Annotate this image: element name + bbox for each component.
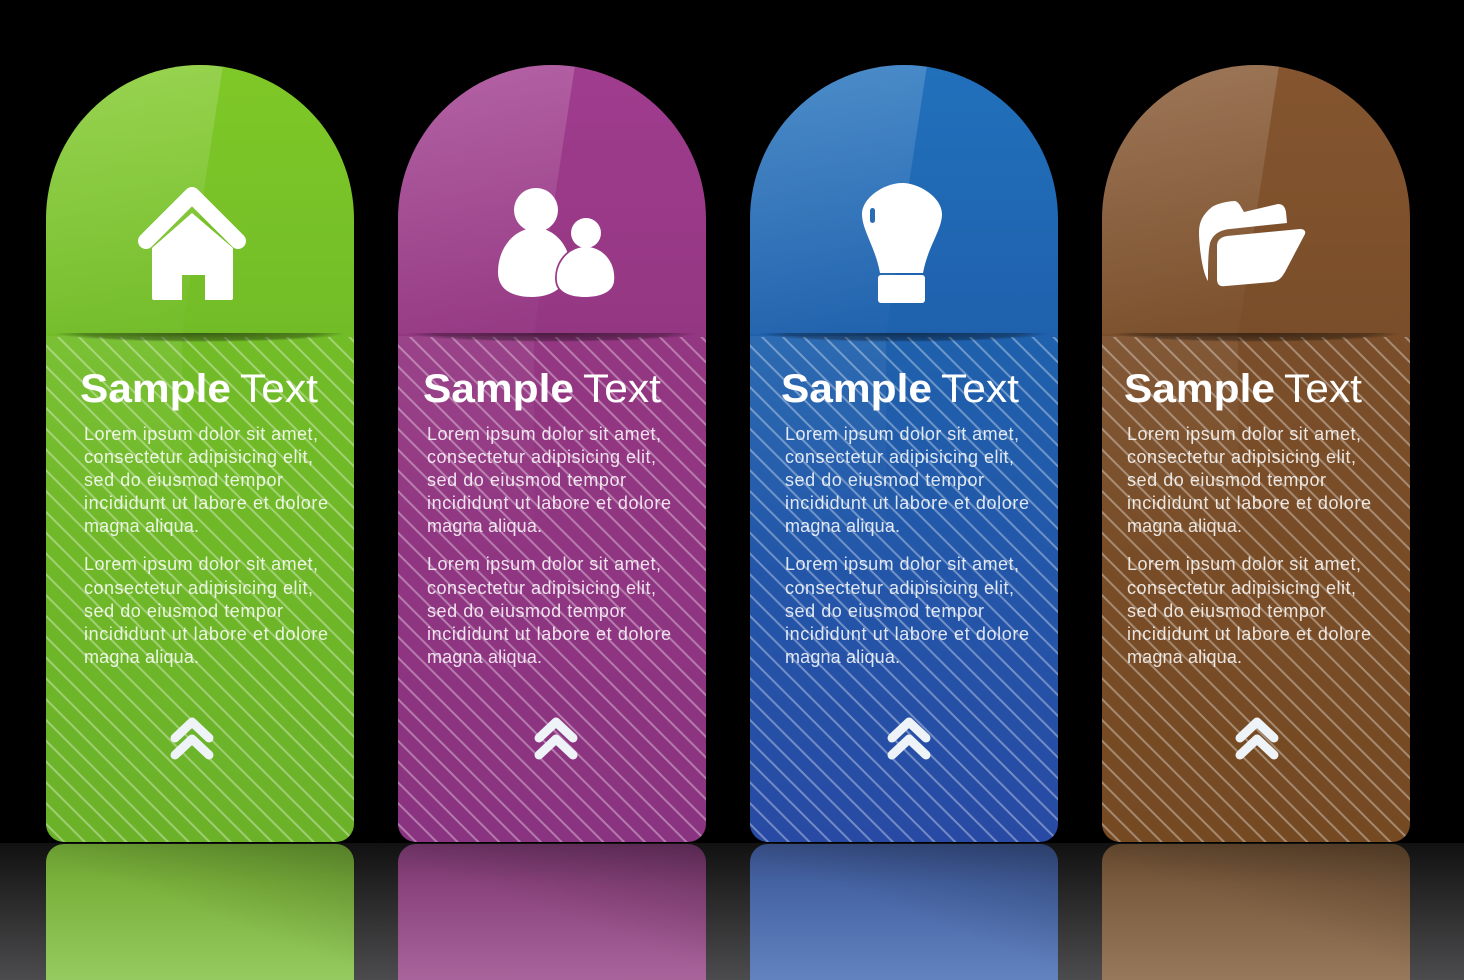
glossy highlight <box>750 65 927 319</box>
text block: second paragraph: incididunt ut labore et dolore <box>785 624 1029 644</box>
text block: first paragraph: incididunt ut labore et dolore <box>427 493 671 513</box>
header shadow <box>398 333 706 343</box>
text block: second paragraph: magna aliqua. <box>785 647 900 667</box>
text block: second paragraph: consectetur adipisicing elit, <box>427 578 656 598</box>
icon: double chevron <box>892 722 926 755</box>
icon: house <box>146 195 238 300</box>
text block: second paragraph: Lorem ipsum dolor sit amet, <box>427 554 661 574</box>
text block: first paragraph: magna aliqua. <box>785 516 900 536</box>
text block: first paragraph: sed do eiusmod tempor <box>427 470 626 490</box>
text block: second paragraph: incididunt ut labore et dolore <box>84 624 328 644</box>
text block: second paragraph: sed do eiusmod tempor <box>1127 601 1326 621</box>
text block: second paragraph <box>84 554 328 667</box>
text block: first paragraph <box>427 424 671 536</box>
card body <box>1102 65 1410 842</box>
icon: double chevron <box>1240 722 1274 755</box>
heading: Text <box>240 367 318 411</box>
text block: first paragraph: Lorem ipsum dolor sit amet, <box>84 424 318 444</box>
panel: purple people card <box>398 0 706 980</box>
text block: second paragraph: magna aliqua. <box>84 647 199 667</box>
glossy highlight <box>398 65 575 312</box>
text block: first paragraph: consectetur adipisicing elit, <box>785 447 1014 467</box>
text block: second paragraph <box>785 554 1029 667</box>
card body <box>750 65 1058 842</box>
reflection <box>398 844 706 980</box>
text block: second paragraph: incididunt ut labore et dolore <box>1127 624 1371 644</box>
striped panel <box>398 336 706 842</box>
text block: second paragraph: sed do eiusmod tempor <box>84 601 283 621</box>
card body <box>46 65 354 842</box>
striped panel <box>750 336 1058 842</box>
panel: blue bulb card <box>750 0 1058 980</box>
card body <box>398 65 706 842</box>
text block: first paragraph: magna aliqua. <box>84 516 199 536</box>
text block: first paragraph: consectetur adipisicing elit, <box>84 447 313 467</box>
text block: second paragraph: Lorem ipsum dolor sit amet, <box>84 554 318 574</box>
heading: Text <box>1284 367 1362 411</box>
text block: second paragraph: consectetur adipisicing elit, <box>1127 578 1356 598</box>
heading: Sample <box>1124 367 1275 411</box>
text block: first paragraph: magna aliqua. <box>427 516 542 536</box>
striped panel <box>46 336 354 842</box>
text block: first paragraph <box>785 424 1029 536</box>
heading <box>1124 367 1362 411</box>
text block: second paragraph: sed do eiusmod tempor <box>785 601 984 621</box>
header shadow <box>1102 333 1410 343</box>
text block: second paragraph <box>427 554 671 667</box>
icon: people <box>498 188 614 297</box>
reflection <box>750 844 1058 980</box>
text block: second paragraph: sed do eiusmod tempor <box>427 601 626 621</box>
glossy highlight <box>1102 65 1279 316</box>
icon: open folder <box>1199 201 1305 286</box>
text block: second paragraph: magna aliqua. <box>1127 647 1242 667</box>
panel: brown folder card <box>1102 0 1410 980</box>
text block: second paragraph: consectetur adipisicing elit, <box>84 578 313 598</box>
heading: Text <box>941 367 1019 411</box>
heading <box>80 367 318 411</box>
text block: first paragraph: consectetur adipisicing elit, <box>427 447 656 467</box>
header shadow <box>46 333 354 343</box>
glossy highlight <box>46 65 223 316</box>
floor <box>0 843 1464 980</box>
reflection <box>46 844 354 980</box>
text block: first paragraph: incididunt ut labore et dolore <box>1127 493 1371 513</box>
heading: Text <box>583 367 661 411</box>
heading <box>423 367 661 411</box>
heading: Sample <box>80 367 231 411</box>
text block: second paragraph: magna aliqua. <box>427 647 542 667</box>
striped panel <box>1102 336 1410 842</box>
text block: second paragraph: Lorem ipsum dolor sit amet, <box>785 554 1019 574</box>
text block: first paragraph: Lorem ipsum dolor sit amet, <box>785 424 1019 444</box>
text block: first paragraph <box>1127 424 1371 536</box>
text block: second paragraph: Lorem ipsum dolor sit amet, <box>1127 554 1361 574</box>
text block: second paragraph: incididunt ut labore et dolore <box>427 624 671 644</box>
heading <box>781 367 1019 411</box>
panel: green home card <box>46 0 354 980</box>
icon: double chevron <box>175 722 209 755</box>
icon: light bulb <box>862 183 942 303</box>
reflection <box>1102 844 1410 980</box>
text block: first paragraph: incididunt ut labore et dolore <box>785 493 1029 513</box>
text block: first paragraph: consectetur adipisicing elit, <box>1127 447 1356 467</box>
text block: first paragraph <box>84 424 328 536</box>
text block: second paragraph: consectetur adipisicing elit, <box>785 578 1014 598</box>
text block: first paragraph: sed do eiusmod tempor <box>1127 470 1326 490</box>
heading: Sample <box>781 367 932 411</box>
heading: Sample <box>423 367 574 411</box>
header shadow <box>750 333 1058 343</box>
icon: double chevron <box>539 722 573 755</box>
text block: first paragraph: sed do eiusmod tempor <box>84 470 283 490</box>
text block: first paragraph: Lorem ipsum dolor sit amet, <box>1127 424 1361 444</box>
text block: first paragraph: incididunt ut labore et dolore <box>84 493 328 513</box>
text block: first paragraph: sed do eiusmod tempor <box>785 470 984 490</box>
text block: first paragraph: Lorem ipsum dolor sit amet, <box>427 424 661 444</box>
text block: first paragraph: magna aliqua. <box>1127 516 1242 536</box>
text block: second paragraph <box>1127 554 1371 667</box>
